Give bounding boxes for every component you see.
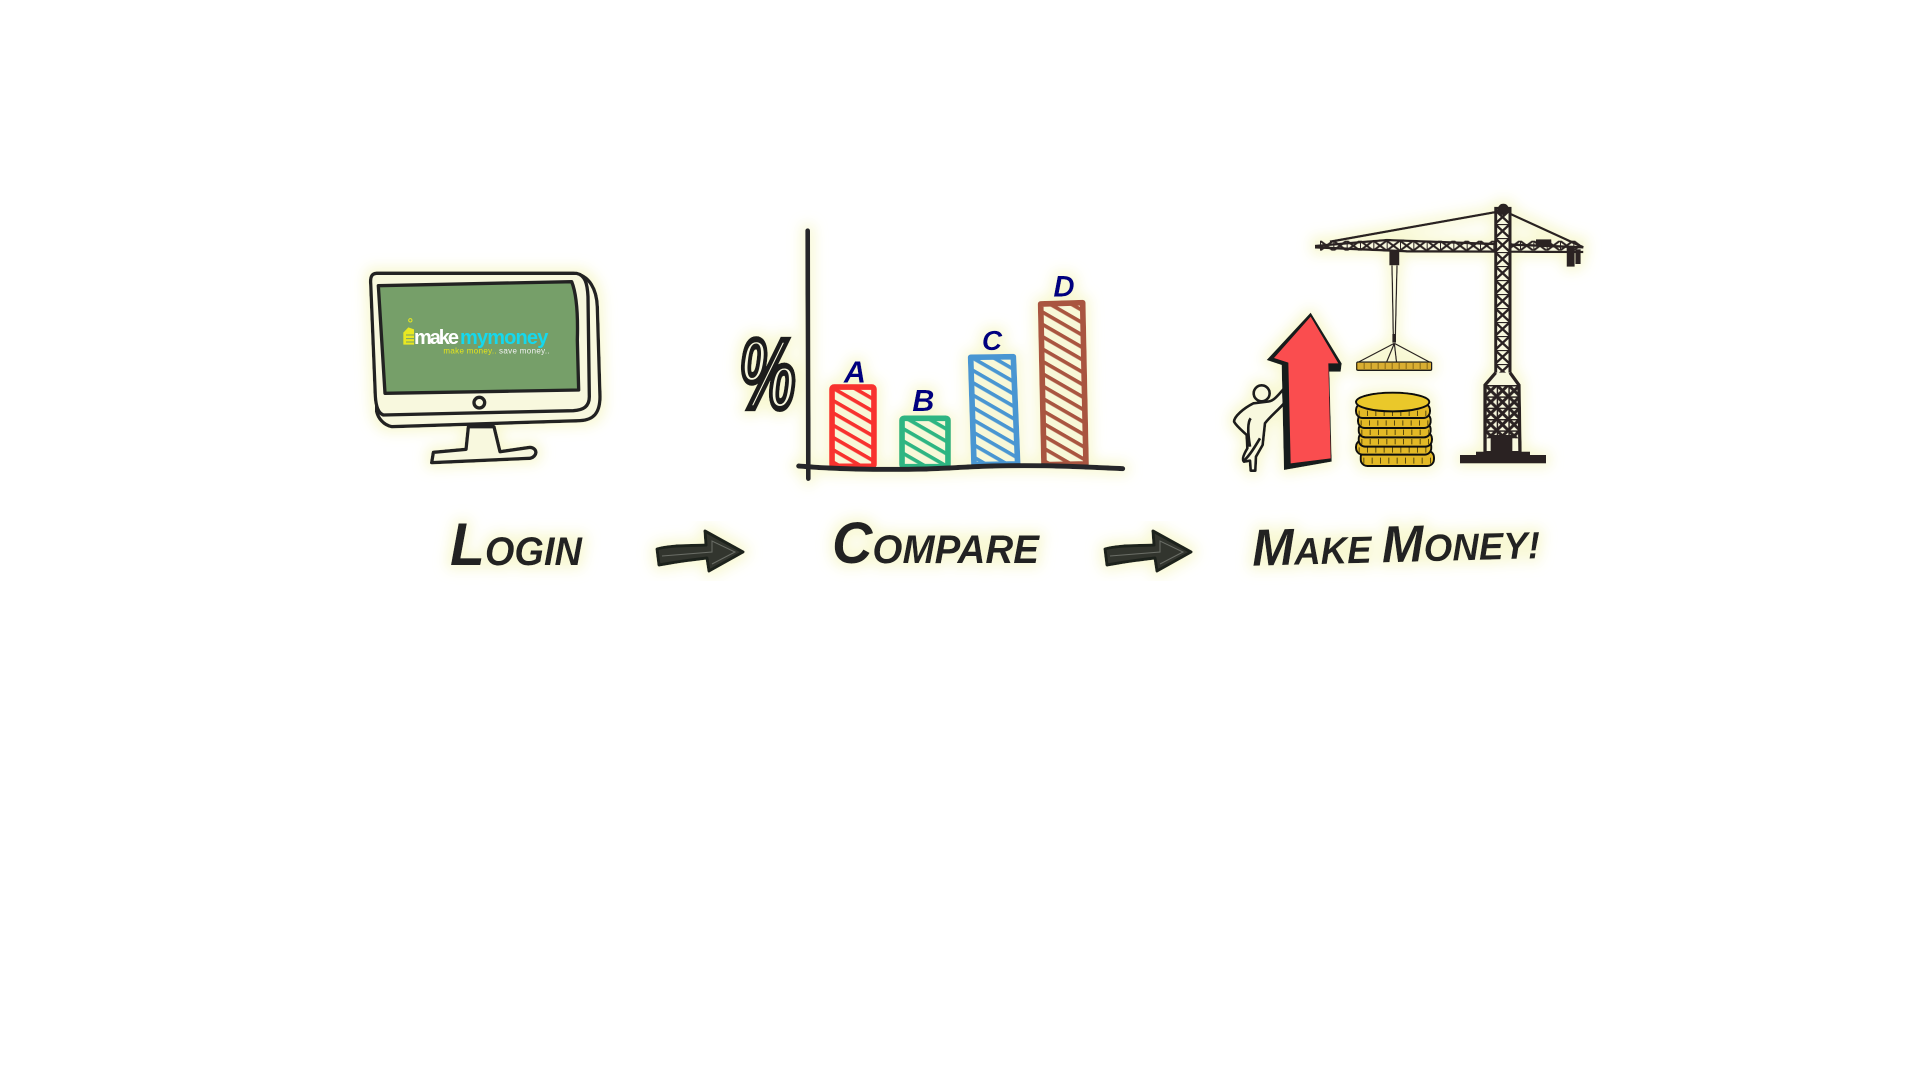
monitor front frame	[371, 273, 589, 415]
monitor screen	[378, 282, 579, 393]
label: Login: LOGIN	[450, 511, 583, 578]
logo wordmark: mymoney	[460, 327, 548, 349]
bar A	[832, 355, 874, 466]
label: Compare: COMPARE	[832, 511, 1040, 576]
crane tower	[1460, 204, 1546, 463]
illustration: crane, arrow and coins	[1234, 204, 1583, 471]
percent symbol: %	[739, 319, 795, 430]
bar B: B	[912, 384, 934, 418]
logo tagline: save money..	[499, 346, 550, 355]
label: Make Money!: MAKE MONEY!	[1251, 512, 1541, 578]
monitor button	[474, 397, 485, 408]
crane jib	[1315, 239, 1583, 267]
bar C	[971, 325, 1018, 465]
logo icon	[403, 319, 414, 345]
red up arrow	[1267, 313, 1342, 470]
bar B	[902, 384, 948, 467]
logo tagline: make money..	[443, 346, 497, 355]
logo wordmark: make	[414, 327, 459, 349]
arrow: login to compare	[657, 531, 743, 571]
bar chart: percent comparison	[739, 231, 1123, 479]
bar C: C	[982, 325, 1003, 356]
illustration: computer monitor	[371, 273, 600, 463]
crane tie cables	[1330, 211, 1583, 247]
chart axes	[799, 231, 1123, 479]
bar A: A	[843, 355, 866, 389]
person leaning on arrow	[1234, 385, 1284, 471]
monitor stand	[432, 427, 536, 463]
bar D: D	[1053, 271, 1075, 304]
crane hook and cable	[1357, 251, 1431, 370]
arrow: compare to make money	[1105, 531, 1191, 571]
lifted coin	[1357, 362, 1432, 370]
bar D	[1041, 271, 1086, 465]
monitor back edge	[377, 273, 600, 427]
coin stack	[1356, 393, 1434, 466]
